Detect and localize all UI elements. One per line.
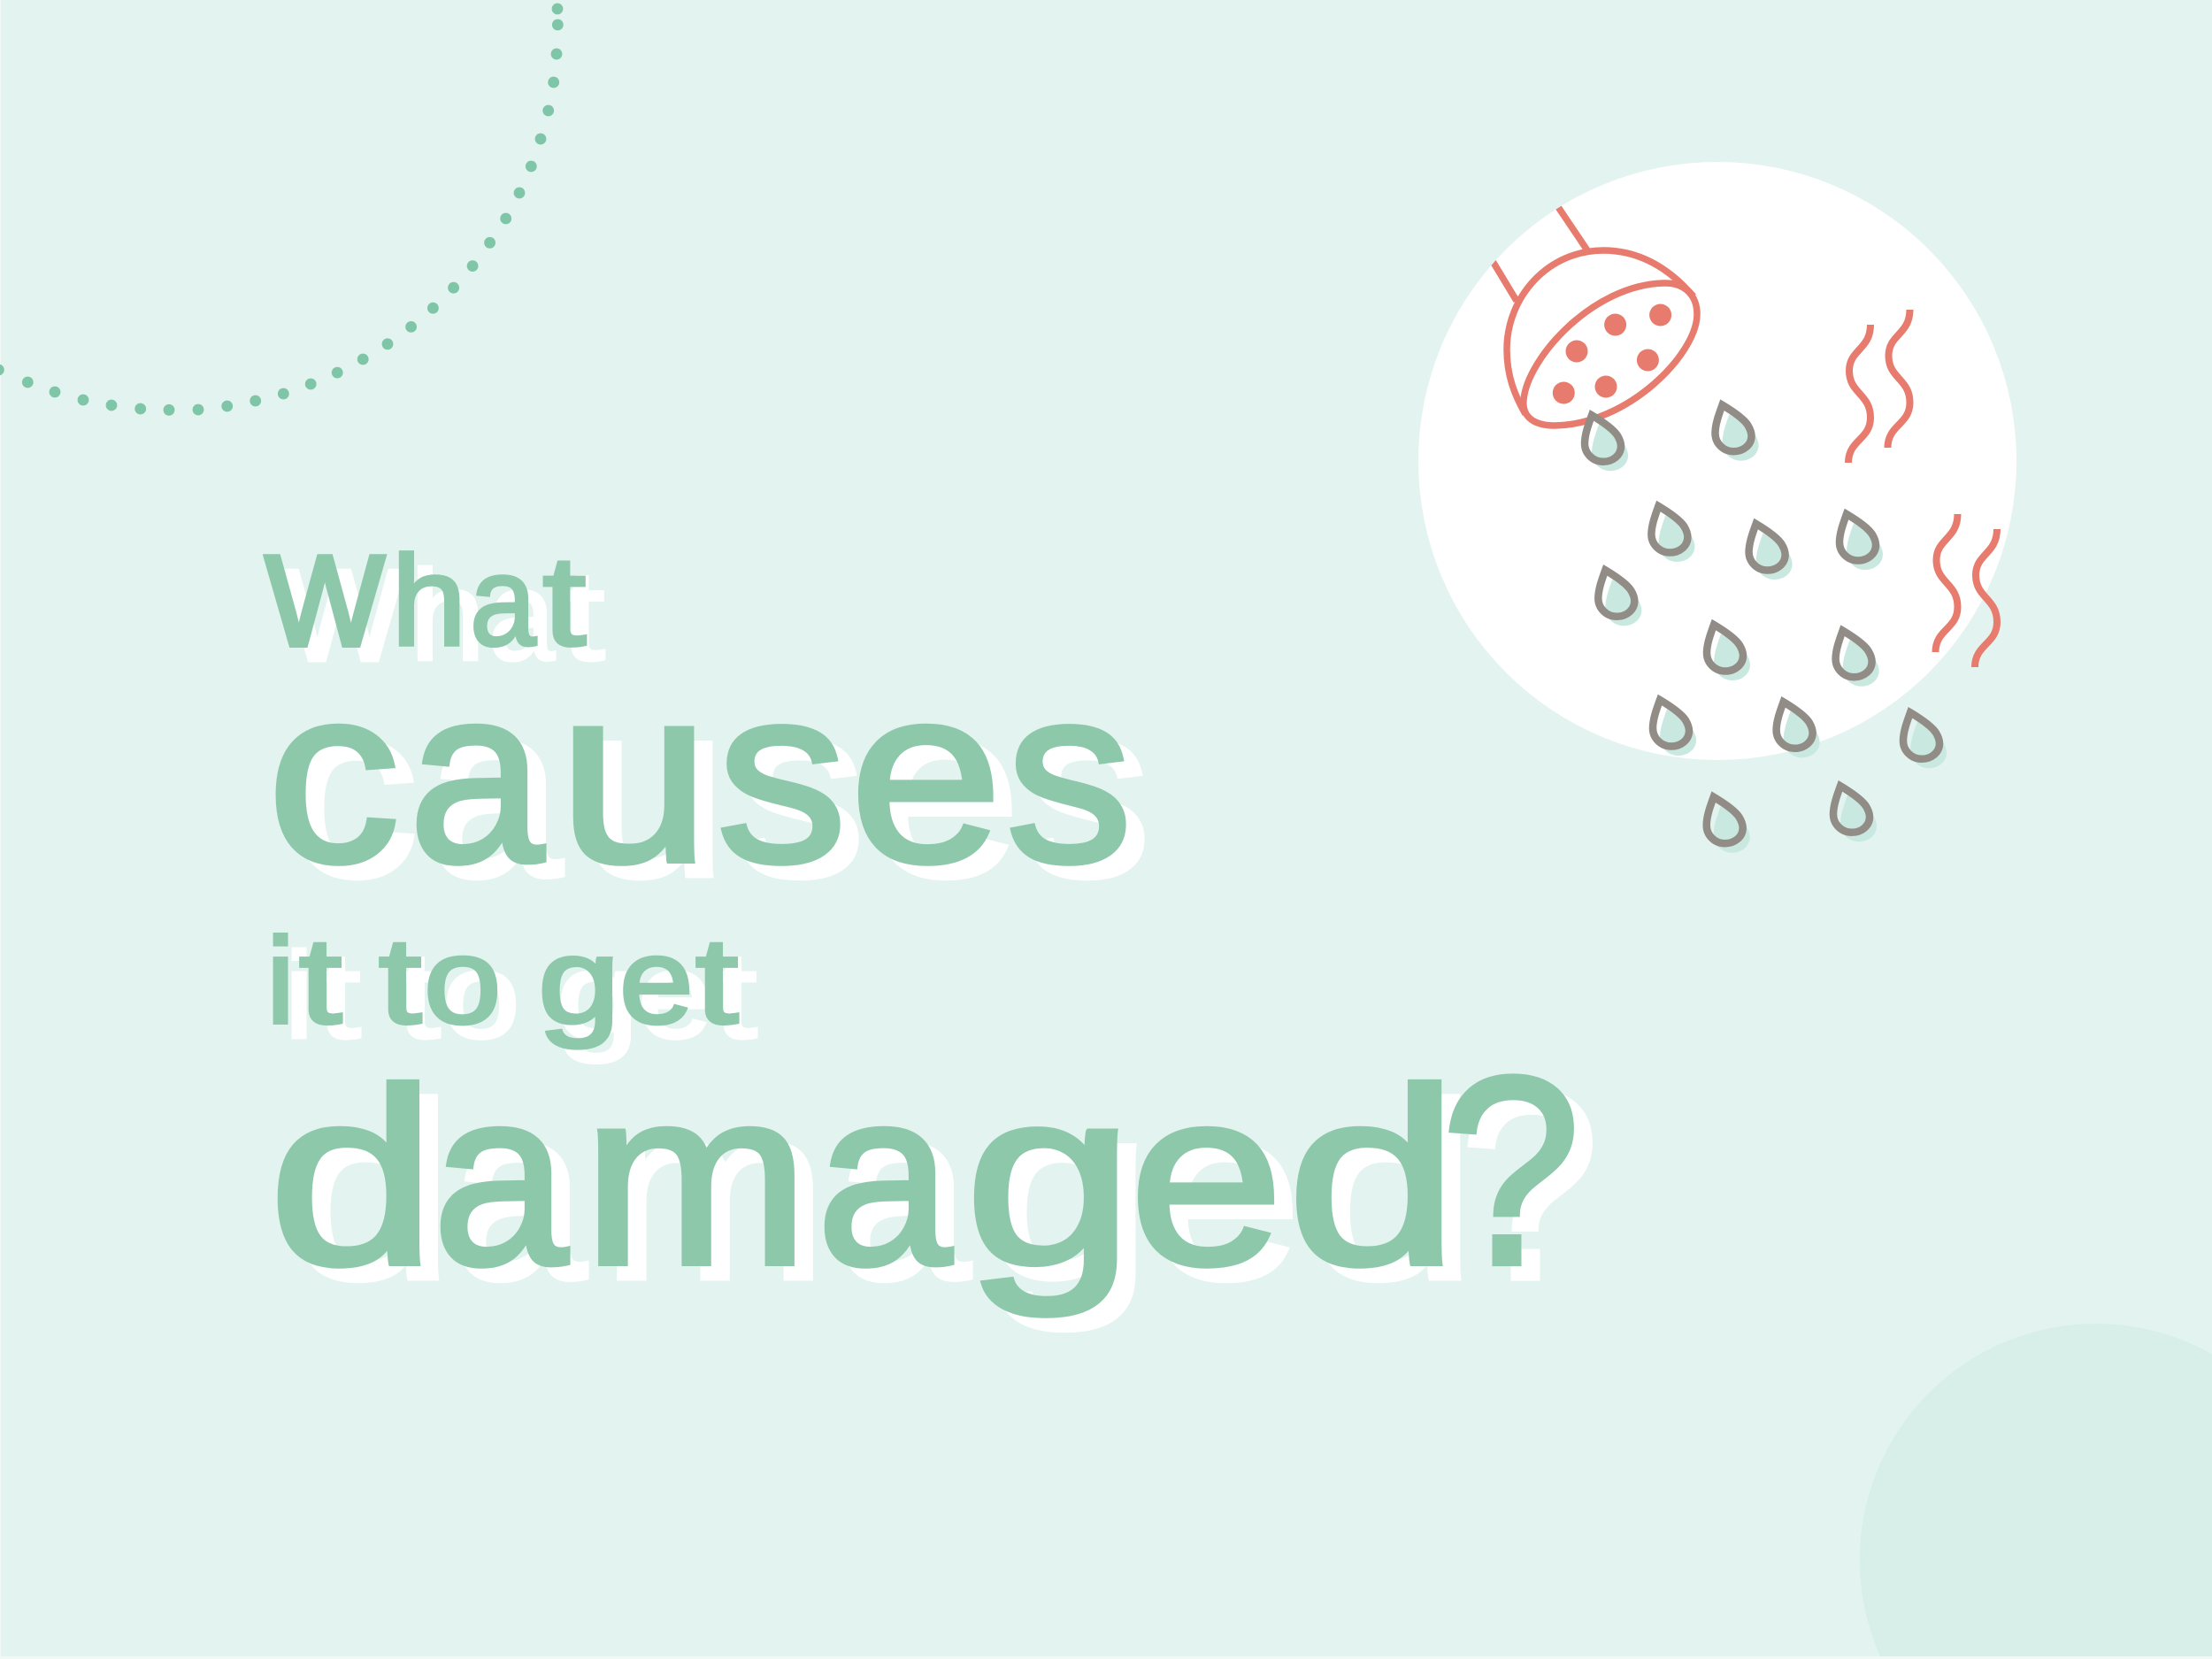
background corner circle	[1860, 1324, 2212, 1656]
text: causes: e	[849, 634, 1002, 914]
shadow: causes: s	[1025, 649, 1151, 929]
shadow: causes: s	[735, 649, 865, 929]
shower dome	[1507, 250, 1694, 414]
text: damaged?: ?	[1441, 1021, 1580, 1321]
text: damaged?: g	[964, 1037, 1134, 1317]
shadow: it to get: o	[442, 928, 519, 1064]
shadow: damaged?: e	[1148, 1052, 1302, 1332]
text: damaged?: e	[1129, 1037, 1284, 1317]
shadow: it to get: e	[638, 928, 712, 1064]
shadow: it to get: t	[397, 928, 440, 1064]
text: it to get: o	[424, 913, 501, 1049]
text: it to get: g	[538, 913, 620, 1049]
shadow: causes: e	[868, 649, 1021, 929]
shadow: damaged?	[287, 1036, 1599, 1335]
heading line: What	[263, 529, 605, 687]
shadow: it to get: t	[318, 928, 360, 1064]
text: it to get	[266, 913, 740, 1050]
shadow: causes	[286, 649, 1151, 929]
shower pipe	[1488, 199, 1587, 301]
shadow: damaged?: a	[835, 1052, 971, 1332]
text: damaged?: d	[1286, 1037, 1459, 1317]
text: What: a	[470, 529, 536, 672]
shower face	[1524, 283, 1697, 426]
shadow: What: a	[488, 544, 555, 687]
shadow: it to get: t	[714, 928, 757, 1064]
heading line: damaged?	[268, 1021, 1599, 1335]
text: causes: s	[1006, 634, 1133, 914]
text: it to get: i	[266, 913, 296, 1049]
icon: heat waves upper	[1848, 310, 1909, 463]
text: What: W	[265, 529, 384, 672]
text: damaged?: d	[268, 1037, 436, 1317]
shadow: damaged?: d	[1305, 1052, 1478, 1332]
shadow: it to get: g	[557, 928, 639, 1064]
icon: shower head	[1488, 199, 1697, 426]
shadow: What: t	[561, 544, 605, 687]
text: damaged?	[268, 1021, 1580, 1321]
text: causes: c	[267, 634, 400, 914]
shadow: damaged?: m	[601, 1052, 828, 1332]
white circle	[1418, 162, 2016, 760]
shadow: causes: a	[427, 649, 563, 929]
text: it to get: t	[695, 913, 738, 1049]
shadow: What: h	[410, 544, 485, 687]
text: damaged?: m	[582, 1037, 810, 1317]
shower nozzles	[1553, 304, 1671, 403]
text: What: h	[391, 529, 466, 672]
text: causes: s	[717, 634, 847, 914]
text: it to get: t	[379, 913, 421, 1049]
heading line: causes	[267, 634, 1151, 929]
dotted arc	[0, 4, 564, 416]
text: it to get: t	[299, 913, 342, 1049]
shadow: damaged?: a	[451, 1052, 587, 1332]
text: it to get: e	[619, 913, 694, 1049]
text: causes: u	[558, 634, 710, 914]
text: What	[263, 529, 588, 672]
shadow: damaged?: g	[983, 1052, 1153, 1332]
shadow: damaged?: ?	[1460, 1036, 1599, 1335]
icon: heat waves lower	[1936, 514, 1997, 667]
text: damaged?: a	[817, 1037, 952, 1317]
heading line: it to get	[266, 913, 757, 1064]
text: causes: a	[409, 634, 544, 914]
shadow: causes: u	[577, 649, 729, 929]
shadow: What	[284, 544, 605, 687]
shadow: it to get	[285, 928, 757, 1064]
text: What: t	[542, 529, 587, 672]
text: damaged?: a	[433, 1037, 568, 1317]
icon: water drops	[1585, 405, 1947, 853]
shadow: causes: c	[286, 649, 419, 929]
shadow: What: W	[284, 544, 403, 687]
shadow: damaged?: d	[287, 1052, 455, 1332]
shadow: it to get: i	[285, 928, 314, 1064]
text: causes	[267, 634, 1133, 914]
